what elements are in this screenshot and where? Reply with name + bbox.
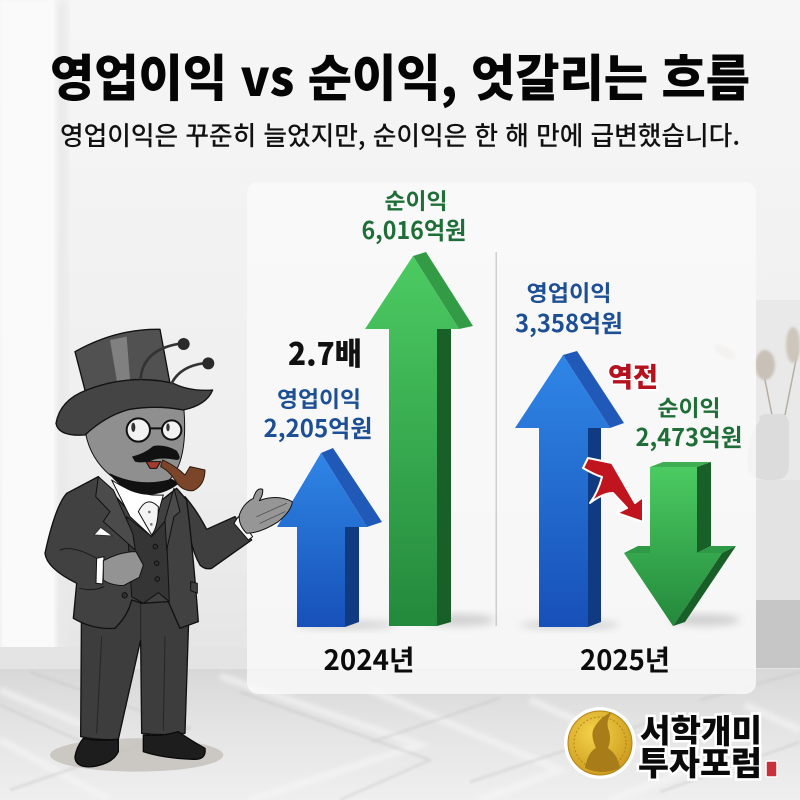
label: reversal: 역전 — [608, 356, 658, 395]
label: net profit 2025 — [636, 391, 742, 453]
plant in vase — [712, 327, 800, 480]
shirt, vest and lapels — [94, 477, 197, 603]
antennae — [141, 344, 203, 383]
jacket — [45, 477, 198, 629]
arrow: 2025 net profit — [624, 462, 736, 626]
logo: coin — [564, 707, 636, 779]
title: 영업이익 vs 순이익, 엇갈리는 흐름 — [50, 39, 750, 111]
floor shadow — [50, 738, 223, 772]
logo: red seal — [766, 761, 777, 777]
label: 2.7 times: 2.7배 — [288, 329, 362, 374]
arrow: 2025 operating profit — [515, 351, 624, 627]
label: 2025: 2025년 — [580, 639, 670, 679]
mouth — [146, 462, 161, 468]
head — [84, 397, 185, 494]
divider between years — [496, 252, 497, 626]
character: ant gentleman — [45, 329, 292, 772]
panel: 2025 chart — [515, 276, 742, 679]
label: net profit 2024: 순이익 — [384, 184, 448, 216]
panel: 2024 chart — [264, 184, 495, 679]
label: operating profit 2025 — [515, 276, 623, 339]
sleeve crease — [60, 549, 104, 590]
arrow: 2024 operating profit — [277, 448, 382, 627]
label: operating profit 2024 — [264, 382, 372, 444]
arrow: reversal — [583, 458, 643, 522]
right arm — [185, 497, 252, 569]
hat — [56, 329, 214, 435]
label: operating profit 2024: 영업이익 — [277, 382, 361, 414]
label: net profit 2025: 2,473억원 — [636, 418, 742, 453]
label: net profit 2025: 순이익 — [658, 391, 720, 423]
glasses — [127, 418, 181, 442]
label: operating profit 2025: 영업이익 — [526, 276, 612, 308]
logo: wordmark: 투자포럼 — [638, 737, 762, 785]
label: net profit 2024 — [362, 184, 466, 246]
label: 2024: 2024년 — [324, 639, 414, 679]
pipe — [161, 460, 205, 491]
moustache — [132, 446, 180, 462]
right hand — [234, 489, 292, 540]
logo: wordmark: 서학개미 — [640, 705, 762, 753]
subtitle: 영업이익은 꾸준히 늘었지만, 순이익은 한 해 만에 급변했습니다. — [60, 116, 740, 153]
label: operating profit 2025: 3,358억원 — [515, 304, 623, 339]
arrow: 2024 net profit — [365, 252, 473, 626]
label: operating profit 2024: 2,205억원 — [264, 409, 372, 444]
bar shadows — [295, 614, 495, 629]
shoes — [75, 732, 205, 767]
left hand — [96, 552, 143, 586]
panel: comparison card — [247, 182, 756, 694]
bar shadows — [520, 614, 740, 629]
label: net profit 2024: 6,016억원 — [362, 211, 466, 246]
legs — [81, 580, 190, 740]
logo: wordmark — [638, 705, 762, 785]
